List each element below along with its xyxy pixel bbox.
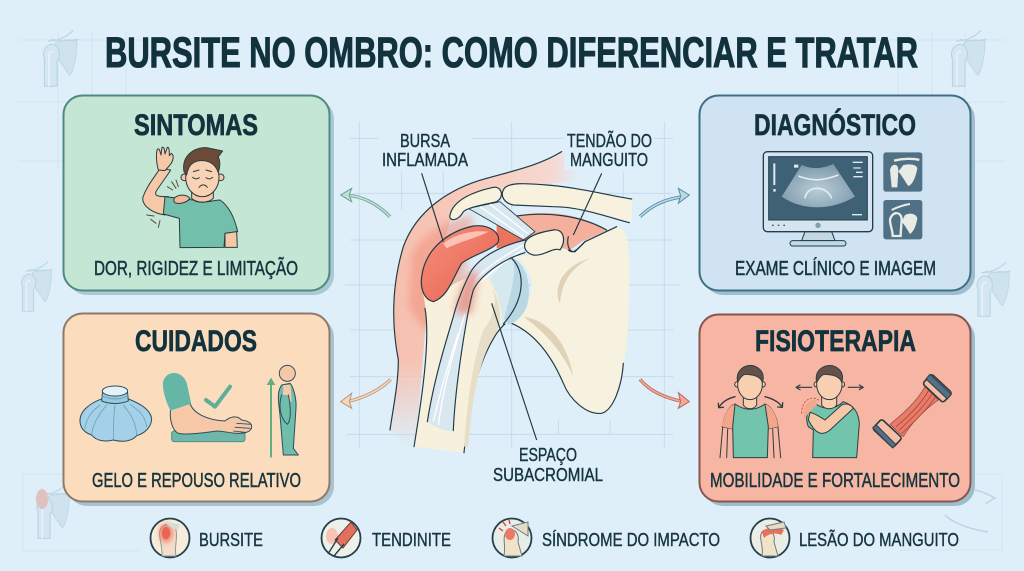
heading: DIAGNÓSTICO [754, 108, 916, 142]
legend item: bursite: BURSITE [199, 529, 263, 550]
caption: DOR, RIGIDEZ E LIMITAÇÃO [94, 256, 298, 280]
label: bursa inflamada: BURSA [400, 130, 451, 151]
icon: shoulder mobility person [718, 365, 783, 458]
icon: posture figure [267, 365, 298, 457]
caption: EXAME CLÍNICO E IMAGEM [735, 257, 936, 280]
acromion [450, 187, 501, 220]
icon: x-ray tile front [883, 152, 922, 192]
heading: CUIDADOS [135, 325, 257, 358]
diagram grid [345, 122, 680, 448]
legend item: tendinite: TENDINITE [372, 529, 451, 550]
legend item: sindrome do impacto [492, 518, 720, 558]
arrow: to fisioterapia [640, 379, 689, 408]
label: tendao do manguito [564, 130, 654, 170]
pink inflamed shoulder area [390, 152, 580, 453]
icon: resistance band [873, 374, 952, 448]
label: bursa inflamada: INFLAMADA [382, 149, 469, 170]
icon: cross-body stretch person [796, 365, 863, 458]
clavicle [502, 184, 632, 222]
label: espaco subacromial [493, 444, 603, 485]
legend item: tendinite [322, 518, 451, 558]
label: bursa inflamada [378, 130, 472, 170]
icon: ice bag [80, 386, 152, 441]
heading: SINTOMAS [134, 109, 258, 142]
label leader lines [422, 173, 602, 440]
icon: check mark [206, 387, 230, 407]
panel: sintomas [64, 96, 334, 295]
icon: person with shoulder pain [143, 147, 238, 248]
arrow: to diagnostico [640, 188, 689, 217]
coracoid [525, 230, 563, 255]
label: espaco subacromial: ESPAÇO [519, 444, 577, 465]
legend item: lesao do manguito [750, 518, 959, 558]
panel: diagnostico [700, 96, 975, 295]
central shoulder anatomy diagram [341, 122, 689, 453]
panel: cuidados [64, 314, 334, 506]
ligament [468, 202, 535, 240]
legend item: lesao do manguito: LESÃO DO MANGUITO [799, 529, 959, 550]
red subacromial zone [497, 213, 607, 250]
humerus [414, 277, 502, 453]
legend [150, 518, 959, 558]
legend item: sindrome do impacto: SÍNDROME DO IMPACTO [542, 529, 720, 550]
rotator cuff tendon [427, 240, 525, 431]
glenoid cartilage [490, 257, 529, 325]
heading: FISIOTERAPIA [755, 325, 916, 358]
legend item: bursite [150, 518, 263, 558]
icon: resting arm [163, 374, 252, 442]
label: espaco subacromial: SUBACROMIAL [493, 464, 603, 485]
icon: ultrasound monitor [763, 152, 873, 246]
label: tendao do manguito: TENDÃO DO [567, 130, 652, 151]
arrow: to cuidados [341, 379, 391, 408]
icon: x-ray tile side [883, 200, 922, 239]
arrow: to sintomas [341, 188, 390, 217]
inflamed bursa [421, 226, 499, 302]
panel: fisioterapia [700, 314, 975, 506]
caption: GELO E REPOUSO RELATIVO [92, 470, 301, 492]
scapula [510, 227, 629, 413]
label: tendao do manguito: MANGUITO [570, 149, 648, 170]
